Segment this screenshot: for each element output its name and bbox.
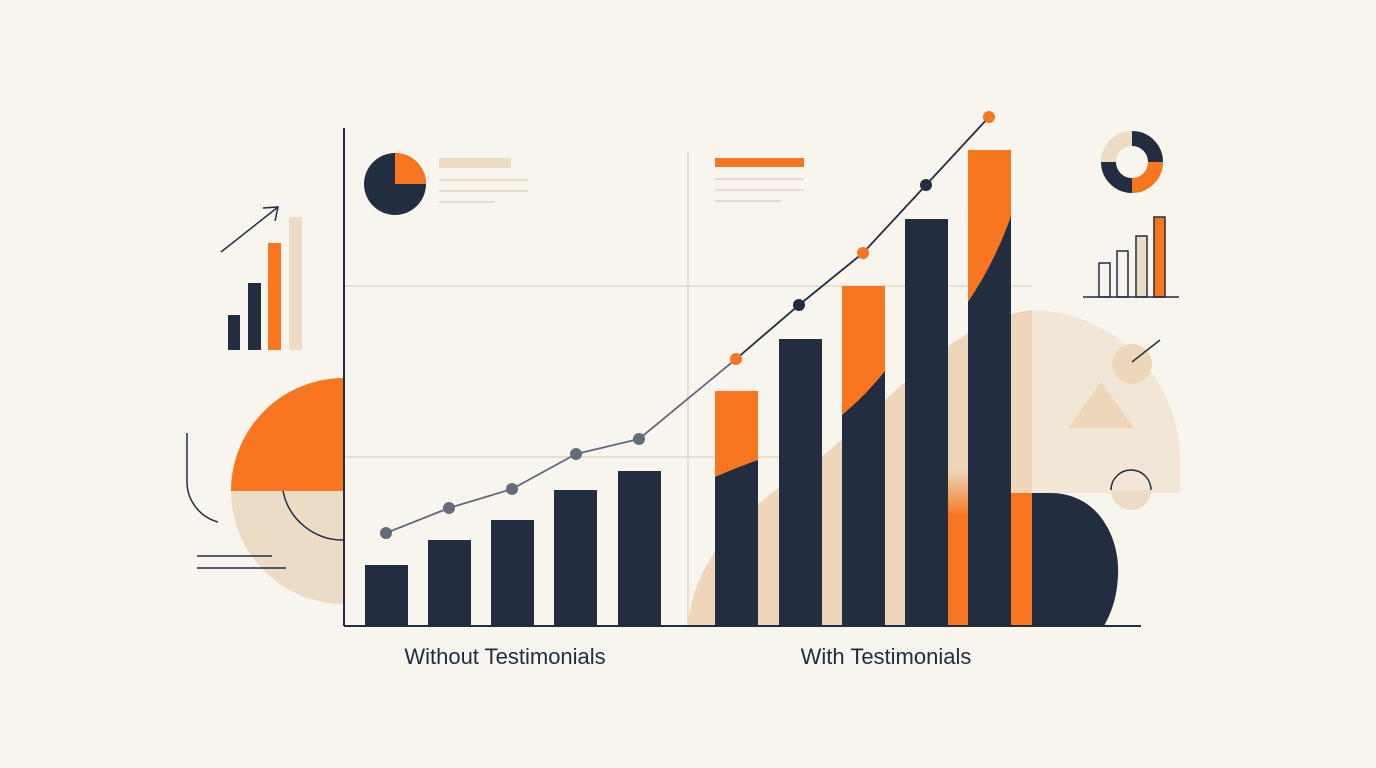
left bracket decor bbox=[187, 433, 286, 568]
bars: without testimonials bbox=[365, 471, 661, 626]
icon: pie chart bbox=[364, 153, 426, 215]
text placeholder right bbox=[715, 158, 804, 201]
icon: donut chart bbox=[1108, 138, 1156, 186]
label: without testimonials: Without Testimonials bbox=[404, 644, 606, 669]
label: with testimonials: With Testimonials bbox=[801, 644, 971, 669]
icon: circle with line bbox=[1112, 340, 1160, 384]
bars: with testimonials bbox=[715, 150, 1011, 626]
left decorative circle bbox=[231, 378, 344, 604]
icon: mini bar chart right bbox=[1083, 217, 1179, 297]
background shape: beige hill bbox=[688, 310, 1032, 626]
background shape: light beige circle bbox=[1032, 310, 1180, 493]
navy half shape bbox=[1032, 493, 1118, 626]
axes bbox=[344, 128, 1141, 626]
icon: triangle bbox=[1068, 382, 1134, 428]
trend line bbox=[380, 111, 995, 539]
orange strips bbox=[948, 470, 1032, 626]
icon: semicircle bbox=[1111, 470, 1151, 510]
text placeholder left bbox=[439, 158, 528, 202]
icon: trend arrow bbox=[221, 207, 278, 252]
icon: mini bar chart left bbox=[228, 217, 302, 350]
gridlines bbox=[344, 152, 1032, 626]
